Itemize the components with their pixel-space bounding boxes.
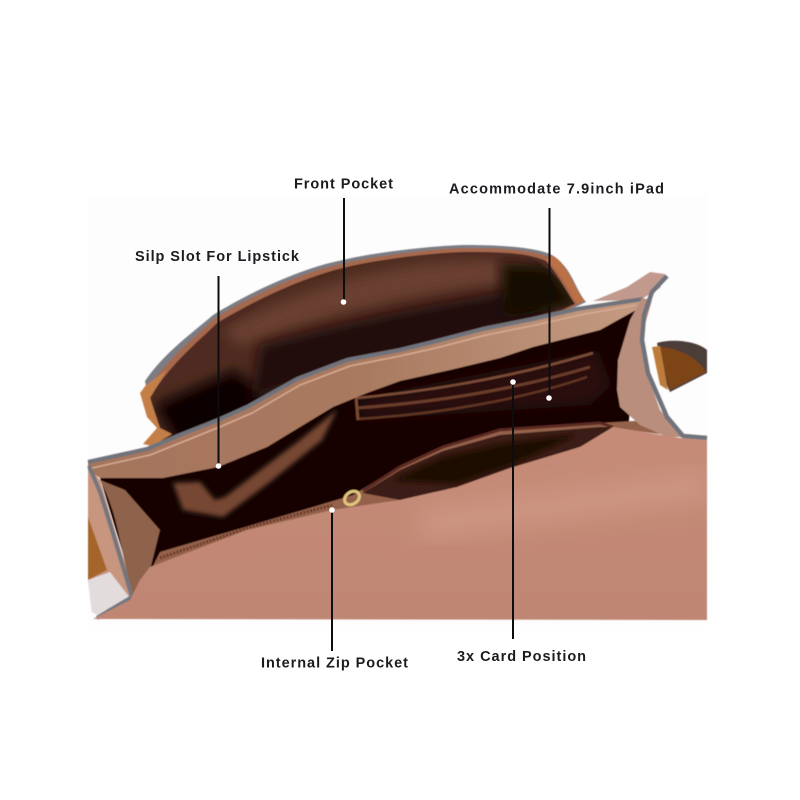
- divider panel with grey piping: [88, 297, 643, 478]
- orange end right: [545, 255, 585, 304]
- callout: Internal Zip Pocket: Internal Zip Pocket: [261, 656, 408, 672]
- callout: 3x Card Position: [457, 379, 586, 665]
- callout: Accommodate 7.9inch iPad: Accommodate 7.9inch iPad: [449, 182, 664, 198]
- callout: Front Pocket: Front Pocket: [294, 176, 393, 192]
- callout: Front Pocket: [294, 176, 393, 305]
- callout: Internal Zip Pocket: [261, 507, 408, 672]
- callout: 3x Card Position: 3x Card Position: [457, 649, 586, 665]
- front flap: [93, 427, 707, 620]
- card slots: [356, 353, 593, 420]
- left gusset: [89, 466, 160, 618]
- bag photo: [88, 245, 707, 620]
- zipper pull: [342, 488, 362, 508]
- fold panel: [173, 410, 337, 517]
- inner dark compartment: [100, 305, 690, 575]
- orange end left: [140, 370, 172, 446]
- zip pocket: [150, 420, 690, 572]
- side strap left: [88, 466, 135, 616]
- infographic: bag interior with callouts: [86, 178, 708, 670]
- callout: Accommodate 7.9inch iPad: [449, 182, 664, 401]
- callout: Silp Slot For Lipstick: [135, 249, 300, 469]
- callout: Silp Slot For Lipstick: Silp Slot For Lipstick: [135, 249, 300, 265]
- right gusset: [617, 276, 707, 438]
- side strap right: [652, 341, 707, 392]
- back corner flap right: [593, 272, 665, 301]
- back wall: front pocket: [140, 245, 586, 450]
